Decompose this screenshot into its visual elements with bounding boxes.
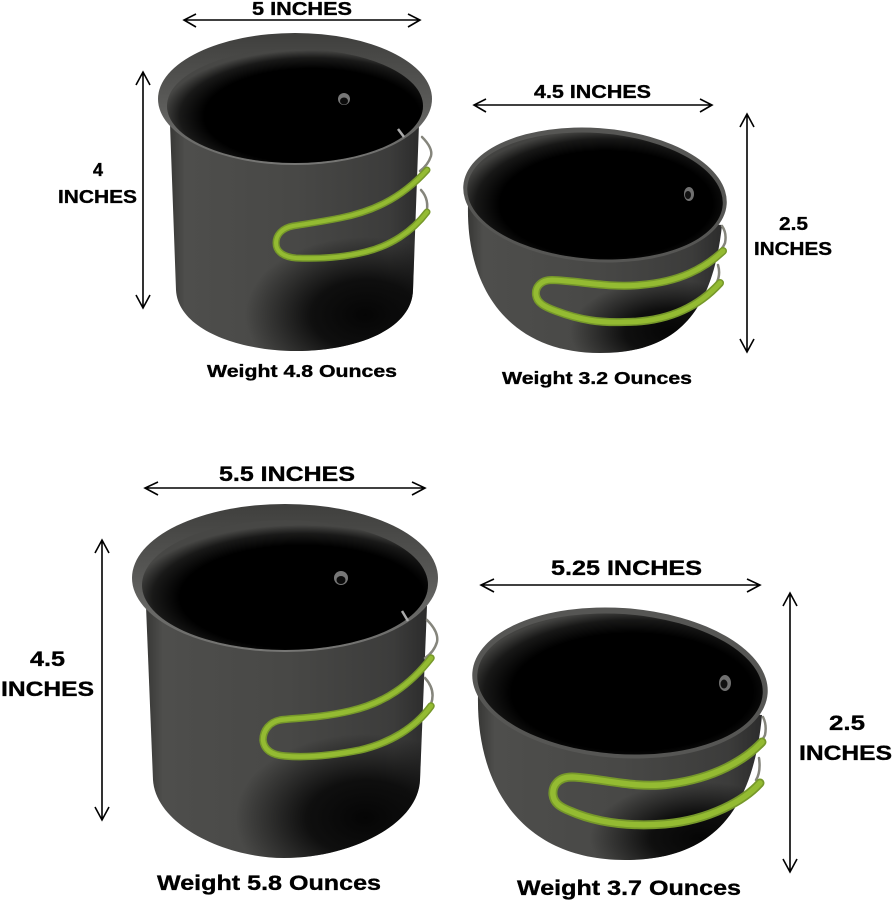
pot rim	[132, 504, 438, 652]
wire handle hinge	[420, 137, 431, 214]
label: 4 inches: INCHES	[58, 187, 137, 207]
arrow: pot 2 width	[474, 99, 712, 112]
bowl body	[468, 205, 722, 353]
wire handle hinge	[425, 620, 437, 704]
label: 2.5 inches top	[754, 214, 832, 259]
green handle	[276, 170, 427, 258]
arrow: pot 4 height	[783, 593, 797, 872]
label: weight 5.8 ounces: Weight 5.8 Ounces	[157, 872, 381, 895]
arrow: pot 4 width	[481, 579, 760, 592]
label: 2.5 inches top: 2.5	[779, 214, 808, 234]
label: 4.5 inches left: 4.5	[30, 648, 65, 671]
pot: 5 inch pot, top left	[158, 33, 432, 351]
rivet	[334, 571, 348, 585]
label: 4.5 inches left: INCHES	[1, 678, 94, 701]
pot: 5.25 inch bowl, bottom right	[472, 608, 768, 860]
pot interior	[142, 526, 428, 650]
label: 4 inches: 4	[93, 160, 103, 180]
arrow: pot 1 height	[136, 72, 150, 308]
bowl interior	[467, 132, 723, 260]
arrow: pot 2 height	[740, 114, 754, 352]
bowl shadow	[578, 285, 708, 353]
label: 2.5 inches bottom: 2.5	[829, 712, 865, 735]
pot rim	[158, 33, 432, 165]
rivet	[684, 187, 694, 201]
wire handle hinge	[716, 226, 726, 284]
bowl body	[478, 695, 762, 860]
pot body shadow	[245, 742, 422, 858]
label: 2.5 inches top: INCHES	[754, 239, 832, 259]
bowl shadow	[599, 788, 744, 860]
bowl rim	[459, 119, 731, 271]
label: weight 3.2 ounces: Weight 3.2 Ounces	[502, 368, 692, 388]
pot body	[170, 124, 419, 351]
pot: 5.5 inch pot, bottom left	[132, 504, 438, 858]
label: 2.5 inches bottom: INCHES	[799, 742, 892, 765]
rivet	[719, 675, 731, 691]
pot: 4.5 inch bowl, top right	[463, 128, 727, 353]
label: 4 inches	[58, 160, 137, 207]
label: weight 3.7 ounces: Weight 3.7 Ounces	[517, 877, 741, 900]
arrow: pot 1 width	[184, 14, 420, 27]
label: 5.5 inches: 5.5 INCHES	[219, 463, 355, 486]
label: 4.5 inches left	[1, 648, 94, 701]
green handle	[263, 658, 431, 757]
bowl rim	[467, 598, 773, 768]
green handle	[536, 251, 723, 322]
label: weight 4.8 ounces: Weight 4.8 Ounces	[207, 361, 397, 381]
arrow: pot 3 height	[95, 540, 109, 820]
wire handle hinge	[755, 717, 766, 780]
pot body	[146, 606, 427, 858]
label: 4.5 inches: 4.5 INCHES	[534, 82, 651, 102]
green handle	[553, 742, 762, 825]
pot interior	[167, 52, 423, 163]
label: 2.5 inches bottom	[799, 712, 892, 765]
arrow: pot 3 width	[145, 482, 425, 495]
bowl interior	[477, 614, 763, 754]
rivet	[338, 93, 350, 105]
pot body shadow	[254, 244, 414, 351]
label: 5.25 inches: 5.25 INCHES	[551, 557, 702, 580]
